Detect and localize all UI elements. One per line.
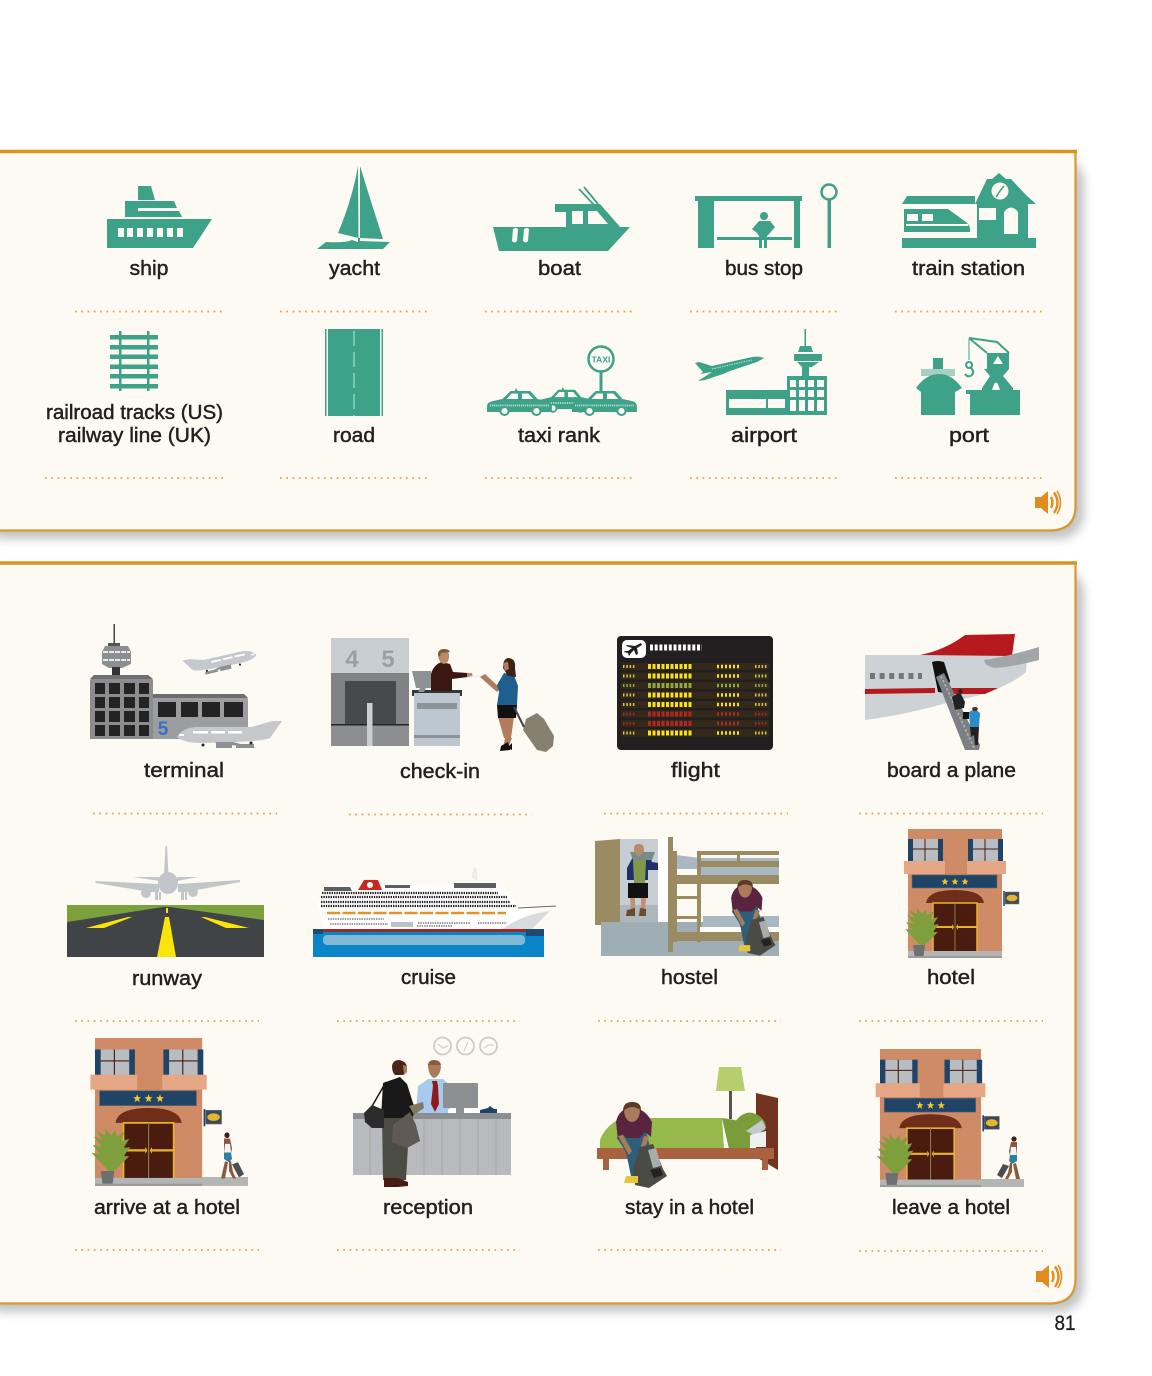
icon: port <box>916 338 1020 415</box>
label: arrive at a hotel: arrive at a hotel <box>94 1197 240 1219</box>
illustration: terminal: 5 <box>158 719 169 740</box>
label: railroad tracks / railway line <box>46 402 223 447</box>
icon: speaker top panel <box>1035 491 1060 514</box>
icon: bus stop <box>695 184 836 248</box>
label: train station: train station <box>912 258 1025 280</box>
label: reception: reception <box>383 1197 473 1219</box>
illustration: arrive at a hotel <box>90 1038 248 1186</box>
label: runway: runway <box>132 968 202 990</box>
label: hostel: hostel <box>661 967 718 989</box>
illustration: board a plane <box>865 634 1039 750</box>
illustration: hostel <box>595 837 779 956</box>
label: road: road <box>333 425 375 447</box>
label: airport: airport <box>731 425 798 447</box>
panel: travel activities <box>0 563 1084 1312</box>
label: bus stop: bus stop <box>725 258 803 280</box>
label: terminal: terminal <box>144 760 224 782</box>
page number: 81 <box>1054 1312 1076 1335</box>
icon: taxi rank: TAXI <box>592 354 610 364</box>
icon: railroad tracks <box>110 331 158 391</box>
icon: taxi rank <box>487 346 637 415</box>
dotted answer lines: top panel <box>45 312 1043 478</box>
illustration: flight departures board <box>617 636 773 750</box>
icon: road <box>325 329 383 416</box>
label: taxi rank: taxi rank <box>518 425 601 447</box>
icon: yacht <box>317 166 390 249</box>
label: board a plane: board a plane <box>887 760 1016 782</box>
illustration: runway <box>67 846 264 957</box>
illustration: reception <box>353 1038 511 1187</box>
label: flight: flight <box>671 760 721 782</box>
illustration: terminal <box>90 624 282 748</box>
dotted answer lines: lower panel <box>75 814 1043 1251</box>
illustration: check-in: 5 <box>381 646 395 673</box>
label: railroad tracks / railway line: railroad tracks (US) <box>46 402 223 424</box>
icon: airport <box>695 329 827 415</box>
label: cruise: cruise <box>401 967 456 989</box>
icon: boat <box>493 187 630 251</box>
label: check-in: check-in <box>400 761 480 783</box>
label: hotel: hotel <box>927 967 975 989</box>
illustration: leave a hotel <box>876 1049 1024 1187</box>
illustration: check-in <box>331 638 554 752</box>
label: port: port <box>949 425 990 447</box>
illustration: hotel <box>904 829 1019 958</box>
illustration: cruise ship <box>313 868 557 957</box>
label: yacht: yacht <box>329 258 380 280</box>
label: ship: ship <box>130 258 168 280</box>
label: stay in a hotel: stay in a hotel <box>625 1197 754 1219</box>
icon: train station <box>902 173 1036 248</box>
label: boat: boat <box>538 258 581 280</box>
label: leave a hotel: leave a hotel <box>892 1197 1010 1219</box>
panel: transport places <box>0 152 1084 539</box>
label: railroad tracks / railway line: railway line (UK) <box>58 425 211 447</box>
illustration: stay in a hotel <box>597 1067 778 1188</box>
icon: ship <box>107 186 212 248</box>
icon: speaker lower panel <box>1036 1265 1062 1288</box>
illustration: check-in: 4 <box>345 646 359 673</box>
